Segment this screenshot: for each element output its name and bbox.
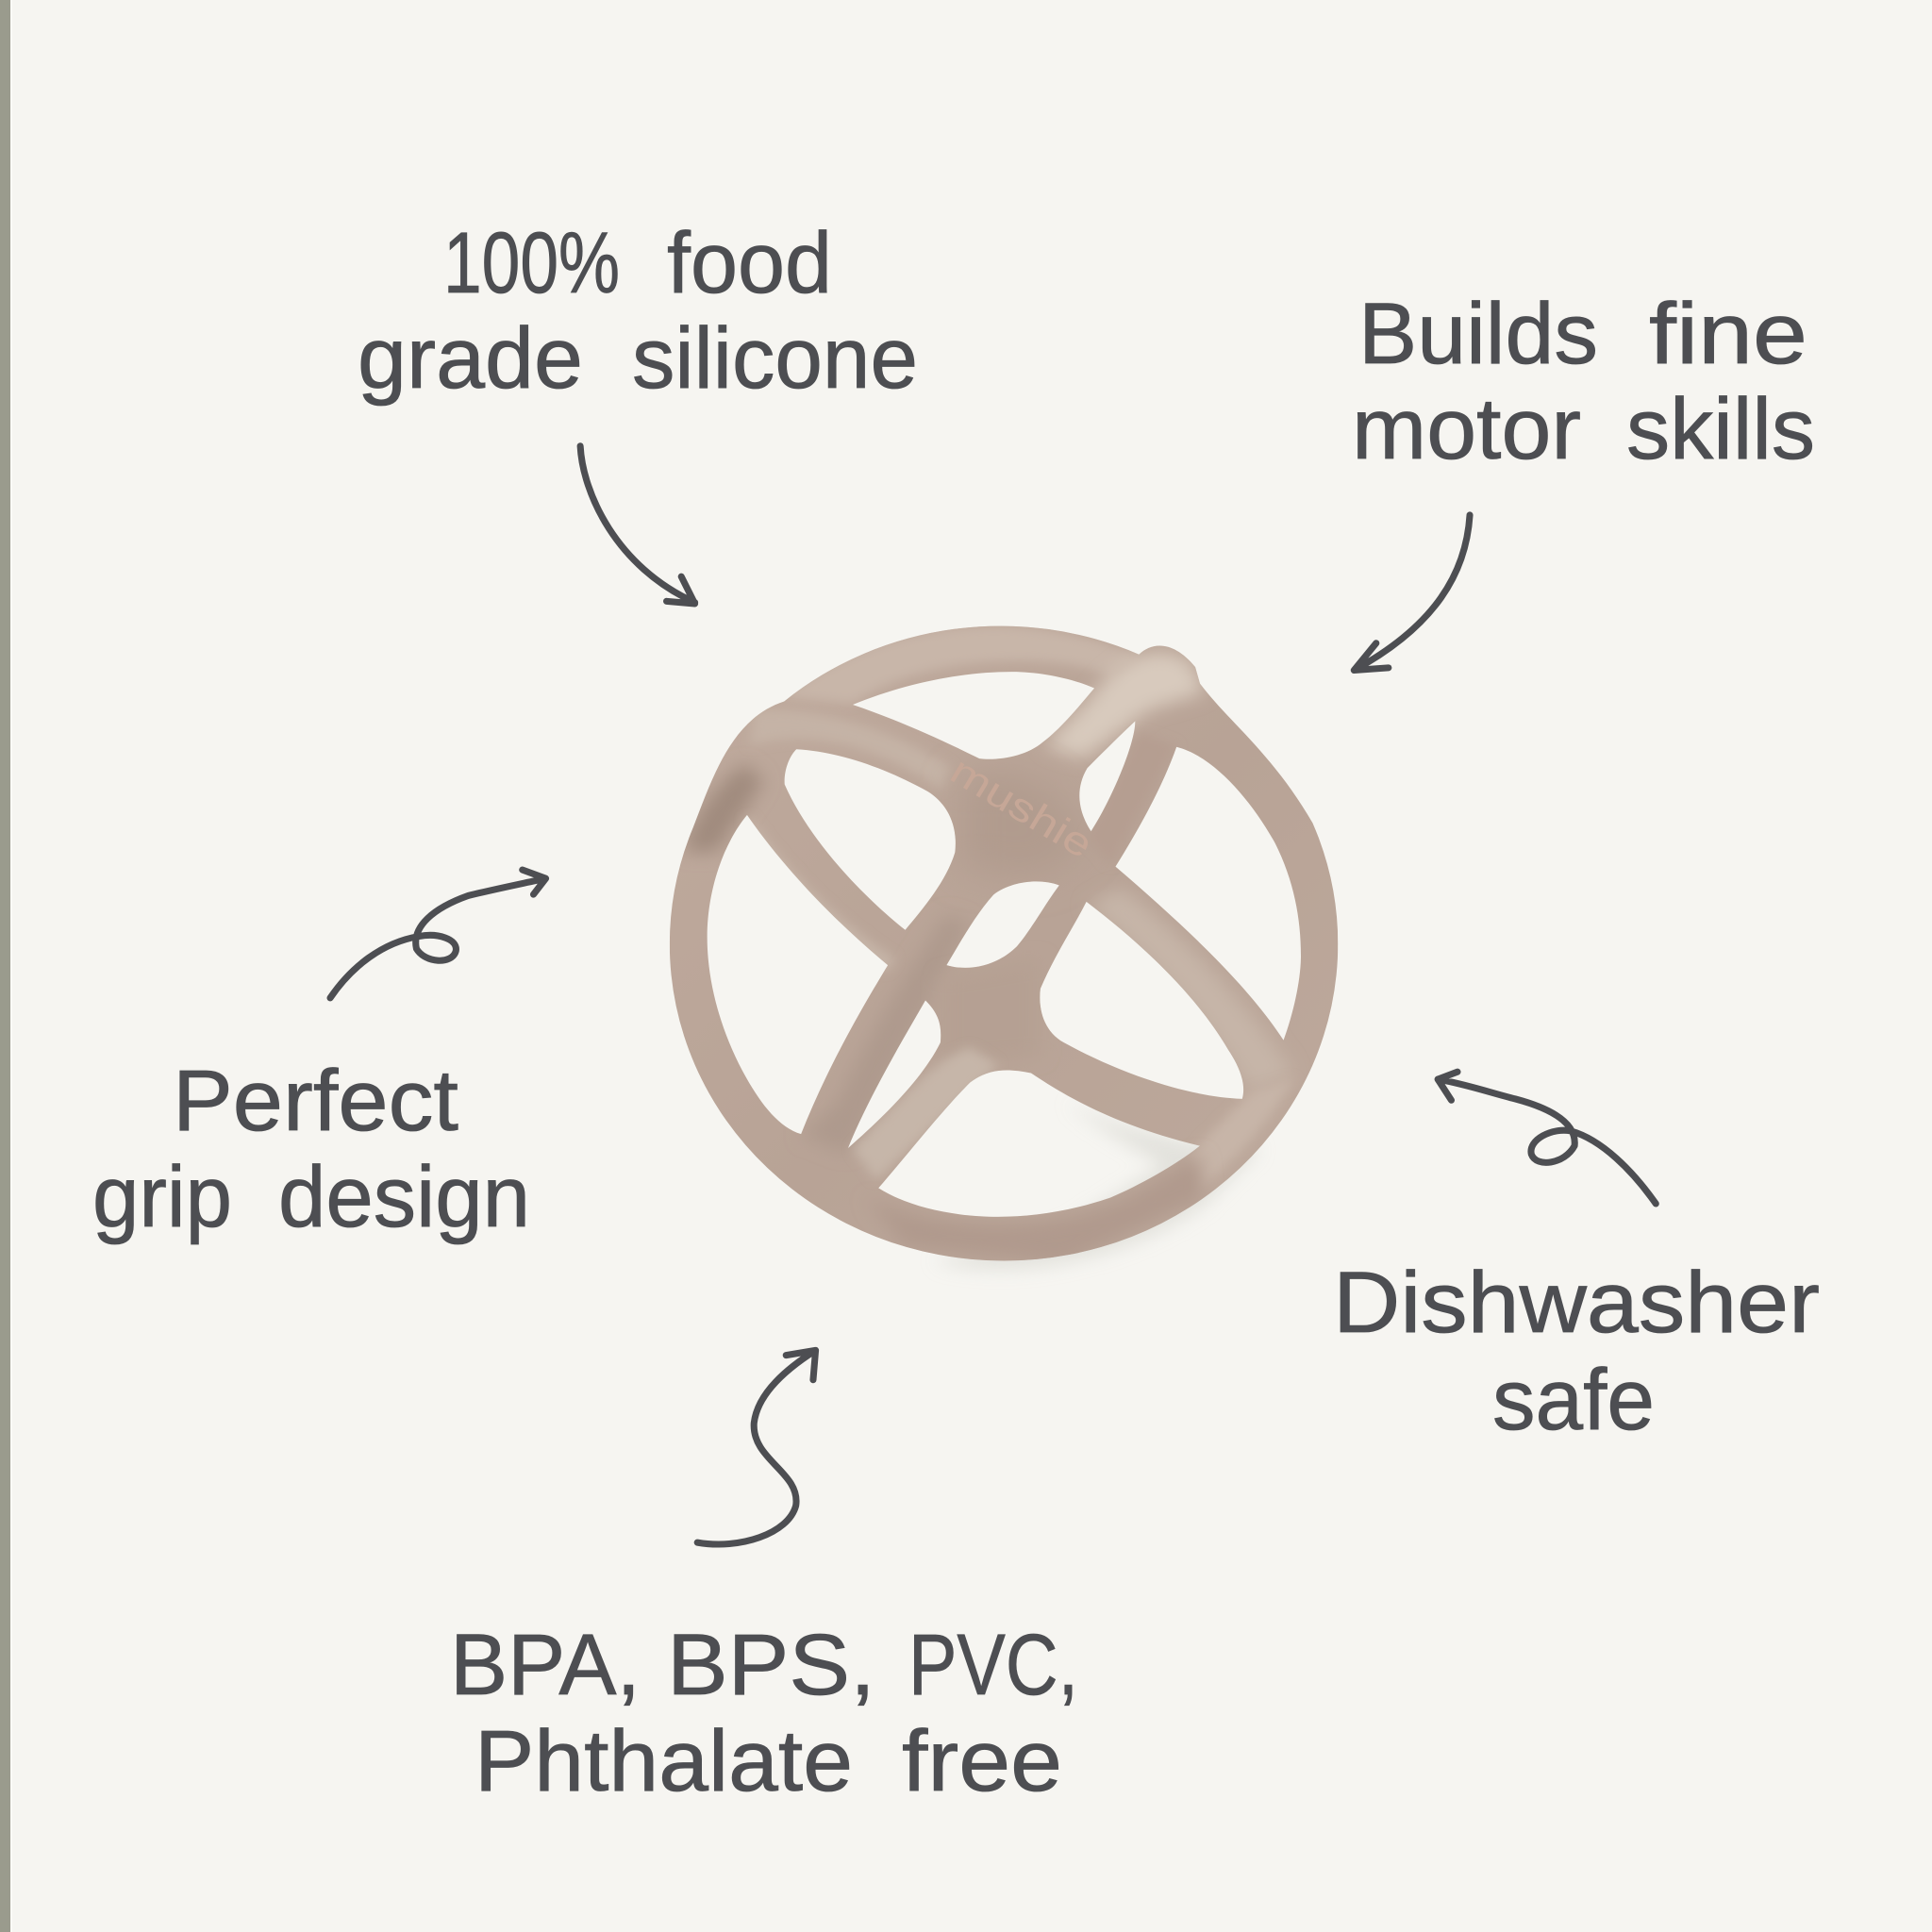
feature: BPA free <box>450 1617 1078 1809</box>
feature: fine motor skills: Builds <box>1358 286 1598 382</box>
feature: fine motor skills: fine <box>1649 286 1807 382</box>
feature: food grade silicone <box>358 215 918 407</box>
feature: food grade silicone: food <box>667 215 832 311</box>
feature: perfect grip <box>92 1053 530 1245</box>
ball shadow <box>932 1101 1261 1269</box>
feature: BPA free: PVC, <box>908 1617 1078 1713</box>
feature: fine motor skills: skills <box>1626 381 1815 477</box>
feature: perfect grip: grip <box>92 1149 232 1245</box>
feature: food grade silicone: silicone <box>632 310 918 407</box>
feature: dishwasher safe <box>1333 1255 1820 1448</box>
feature: food grade silicone: 100% <box>443 215 620 311</box>
ball body <box>670 626 1338 1260</box>
arrow: food grade to ball <box>580 446 695 604</box>
shading <box>684 626 1294 1265</box>
feature: fine motor skills: motor <box>1352 381 1581 477</box>
feature: BPA free: free <box>902 1713 1062 1809</box>
left edge strip <box>0 0 12 1932</box>
arrow: grip to ball <box>330 870 546 998</box>
feature: perfect grip: Perfect <box>173 1053 458 1149</box>
feature: BPA free: Phthalate <box>475 1713 853 1809</box>
feature: food grade silicone: grade <box>358 310 583 407</box>
arrow: fine motor to ball <box>1354 515 1470 670</box>
arrow: BPA free to ball <box>697 1350 816 1544</box>
feature: fine motor skills <box>1352 286 1815 477</box>
feature: dishwasher safe: safe <box>1492 1352 1655 1448</box>
product: sensory ball <box>670 626 1338 1272</box>
feature: perfect grip: design <box>278 1149 530 1245</box>
feature: BPA free: BPA, <box>450 1617 641 1713</box>
arrow: dishwasher to ball <box>1438 1072 1656 1204</box>
feature: BPA free: BPS, <box>667 1617 875 1713</box>
logo: mushie: mushie <box>943 747 1101 867</box>
feature: dishwasher safe: Dishwasher <box>1333 1255 1820 1351</box>
